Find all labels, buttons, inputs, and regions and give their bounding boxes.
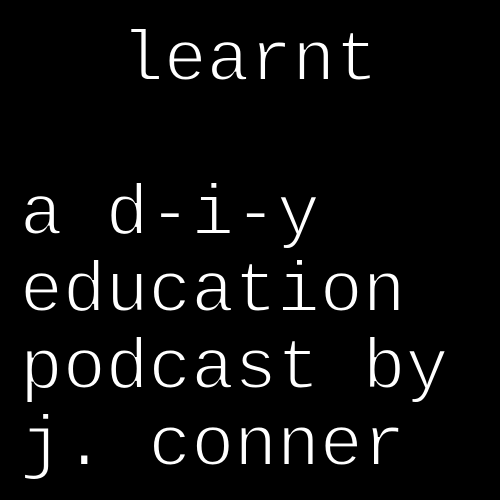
title: learnt xyxy=(121,22,378,102)
text line: podcast by: podcast by xyxy=(20,330,448,410)
text line: j. conner: j. conner xyxy=(20,407,406,487)
text line: education: education xyxy=(20,253,406,333)
text line: a d-i-y: a d-i-y xyxy=(20,176,320,256)
